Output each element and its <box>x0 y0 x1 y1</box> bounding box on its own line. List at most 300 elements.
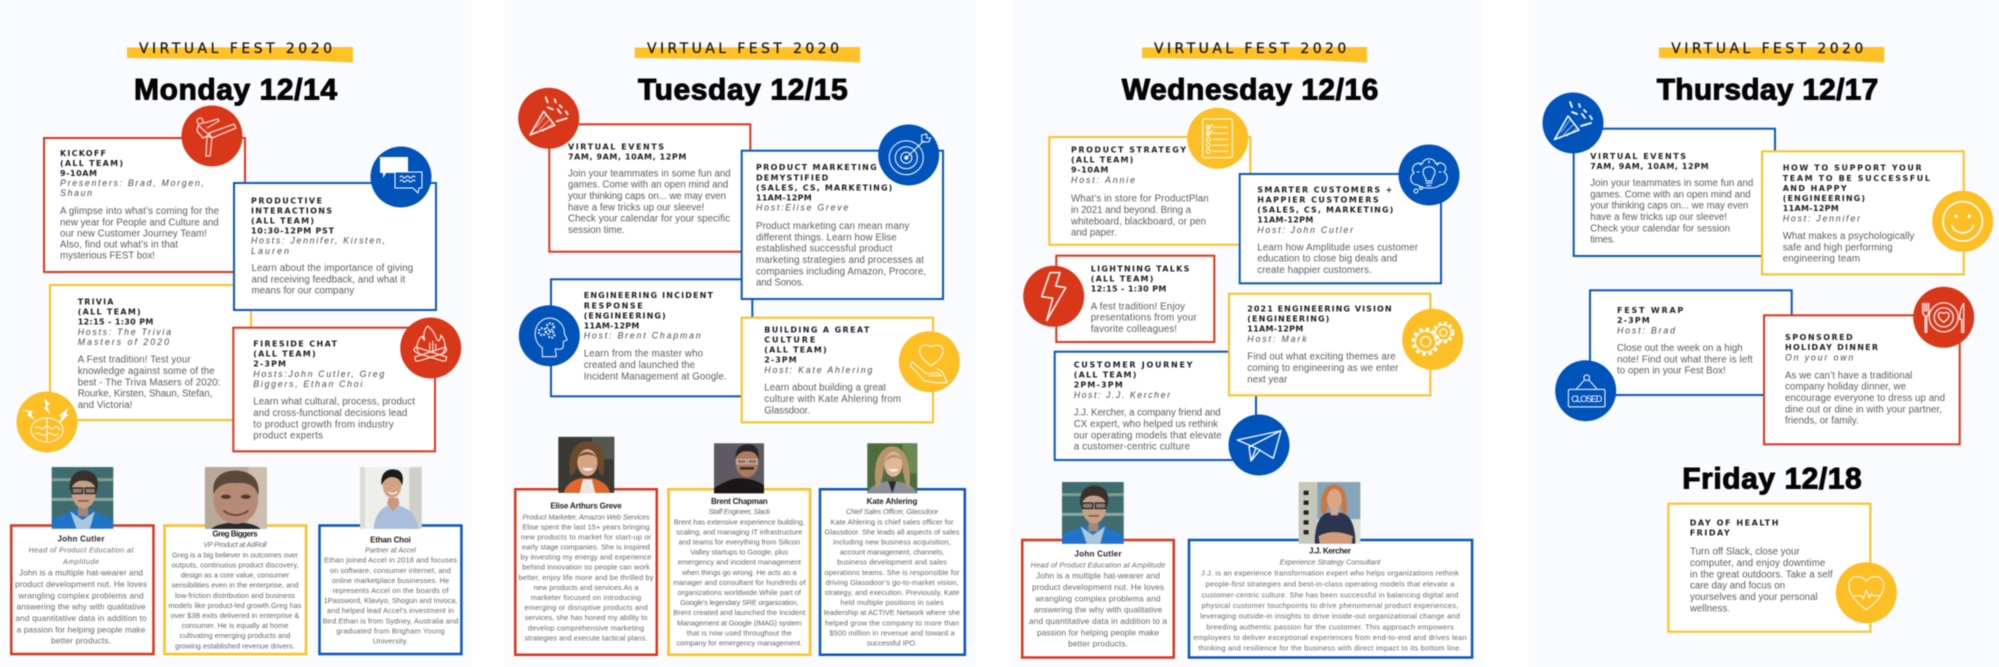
description: Rourke, Kirsten, Shaun, Stefan, <box>78 389 212 400</box>
bio: John Cutler <box>11 467 153 654</box>
session title: 7AM, 9AM, 10AM, 12PM <box>568 152 686 161</box>
icon: lightning bolt <box>1023 266 1084 327</box>
biography: organizations worldwide.While part of <box>678 588 802 597</box>
description: times. <box>1590 235 1615 246</box>
icon: closed sign: CLOSED <box>1571 394 1603 404</box>
role: Chief Sales Officer, Glassdoor <box>846 507 939 516</box>
biography: leadership at ACTIVE Network where she <box>824 608 960 617</box>
session title: (ALL TEAM) <box>251 216 314 225</box>
card: Lightning Talks <box>1023 256 1214 342</box>
description: Incident Management at Google. <box>584 371 727 382</box>
description: marketing strategies and processes at <box>756 255 924 266</box>
biography <box>1029 571 1167 649</box>
description: safe and high performing <box>1783 242 1893 253</box>
name: Ethan Choi <box>370 536 411 545</box>
heading: Tuesday: Tuesday 12/15 <box>638 74 848 106</box>
banner: Virtual Fest 2020: VIRTUAL FEST 2020 <box>139 41 332 57</box>
biography: cultivating emerging products and <box>180 631 290 640</box>
biography: 1Password, Klaviyo, Shogun and Invoca, <box>324 596 457 605</box>
description: mysterious FEST box! <box>60 251 155 262</box>
session title: 2-3PM <box>1617 316 1650 325</box>
description: dine out or dine in with your partner, <box>1785 404 1942 415</box>
description <box>568 168 731 236</box>
session title: CUSTOMER JOURNEY <box>1074 361 1193 370</box>
description: computer, and enjoy downtime <box>1690 558 1825 569</box>
session title: (ENGINEERING) <box>1783 194 1865 203</box>
name: John Cutler <box>1074 550 1122 559</box>
session title: TRIVIA <box>78 298 114 307</box>
description: new year for People and Culture and <box>60 217 219 228</box>
host: Host: John Cutler <box>1257 225 1354 235</box>
session title <box>1257 185 1393 225</box>
description: our new Customer Journey Team! <box>60 228 207 239</box>
biography: thinking and resilience for the business with direct impact to its bottom line. <box>1198 644 1462 653</box>
heading: Wednesday: Wednesday 12/16 <box>1122 74 1378 106</box>
session title <box>78 298 153 327</box>
session title: TEAM TO BE SUCCESSFUL <box>1783 174 1930 183</box>
session title <box>1617 306 1683 325</box>
biography: Google’s legendary SRE organization, <box>680 598 798 607</box>
hosts: Biggers, Ethan Choi <box>253 379 363 389</box>
biography: wrangling complex problems and <box>17 590 144 600</box>
name: Brent Chapman <box>711 497 768 506</box>
session title: ENGINEERING INCIDENT <box>584 291 714 300</box>
description: presentations from your <box>1091 313 1197 324</box>
banner: Virtual Fest 2020: VIRTUAL FEST 2020 <box>1671 41 1863 57</box>
icon: brain with lightning <box>16 392 78 452</box>
biography: develop comprehensive marketing <box>528 623 644 632</box>
photo: Ethan Choi <box>359 466 423 530</box>
description: in the great outdoors. Take a self <box>1690 569 1833 580</box>
name: J.J. Kercher <box>1309 547 1351 556</box>
description: Product marketing can mean many <box>756 221 909 232</box>
bio: Greg Biggers <box>164 467 306 654</box>
description: A fest tradition! Enjoy <box>1091 301 1185 312</box>
biography <box>168 550 302 650</box>
description: have a few tricks up our sleeve! <box>1590 212 1727 223</box>
biography: Glassdoor. She leads all aspects of sales <box>824 527 960 536</box>
description: company holiday dinner, we <box>1785 382 1906 393</box>
session title: RESPONSE <box>584 301 643 310</box>
description: to open in your Fest Box! <box>1617 366 1726 377</box>
biography: passion for helping people make <box>1037 627 1159 637</box>
description: and cross-functional decisions lead <box>253 408 407 419</box>
description: different things. Learn how Elise <box>756 232 897 243</box>
name: John Cutler <box>58 535 104 544</box>
description <box>1074 408 1222 453</box>
biography: marketer focused on introducing <box>531 593 641 602</box>
session title: (SALES, CS, MARKETING) <box>1257 206 1393 215</box>
biography: scaling, and managing IT infrastructure <box>676 527 802 536</box>
description: J.J. Kercher, a company friend and <box>1074 408 1221 419</box>
biography: Valley startups to Google, plus <box>690 548 789 557</box>
description: Close out the week on a high <box>1617 343 1743 354</box>
biography: company for emergency management. <box>676 638 802 648</box>
description: best - The Triva Masers of 2020: <box>78 377 220 388</box>
session title: DAY OF HEALTH <box>1690 518 1778 527</box>
session title <box>1783 164 1930 213</box>
description: culture with Kate Ahlering from <box>764 394 901 405</box>
description: note! Find out what there is left <box>1617 354 1753 365</box>
biography: sensibilities even in the enterprise, and <box>172 581 298 590</box>
description: education to close big deals and <box>1257 254 1397 265</box>
photo: J.J. Kercher <box>1298 481 1362 544</box>
session title: 2-3PM <box>764 356 797 365</box>
icon: campfire <box>400 318 461 378</box>
description: your thinking caps on... we may even <box>568 191 726 202</box>
session title: (ALL TEAM) <box>1071 156 1133 165</box>
role: Amplitude <box>62 557 99 566</box>
session title: FRIDAY <box>1690 528 1730 537</box>
panel: Tuesday <box>504 0 976 667</box>
description: companies including Amazon, Procore, <box>756 266 926 277</box>
host: Host: Jennifer <box>1783 213 1861 223</box>
icon: party popper <box>518 88 579 149</box>
bio: Ethan Choi <box>320 467 461 654</box>
description: Check your calendar for session <box>1590 223 1730 234</box>
biography: and teams for everything from Silicon <box>678 538 800 546</box>
banner: Virtual Fest 2020 <box>127 41 353 62</box>
biography <box>824 517 960 648</box>
host: Host: Brent Chapman <box>584 331 701 341</box>
session title: FIRESIDE CHAT <box>253 340 338 349</box>
card: Sponsored Holiday Dinner <box>1764 287 1974 444</box>
photo: Elise Arthurs Greve <box>558 436 616 494</box>
session title: 12:15 - 1:30 PM <box>78 318 153 327</box>
session title: CULTURE <box>764 336 815 345</box>
biography: that is now used throughout the <box>687 628 792 637</box>
name: Greg Biggers <box>212 530 258 539</box>
hosts <box>251 235 385 256</box>
biography: better products. <box>51 636 111 646</box>
description: games. Come with an open mind and <box>568 180 728 191</box>
biography <box>323 556 458 646</box>
biography: Ethan joined Accel in 2018 and focuses <box>324 556 457 565</box>
biography: a passion for helping people make <box>17 624 146 634</box>
description: Learn about building a great <box>764 383 886 394</box>
description: knowledge against some of the <box>78 366 215 377</box>
biography: helped grow the company to more than <box>825 618 959 627</box>
hosts: Lauren <box>251 246 289 256</box>
session title <box>1690 518 1778 537</box>
biography: product development nut. He loves <box>1032 582 1164 592</box>
hosts: Hosts: The Trivia <box>78 327 171 337</box>
description: What’s in store for ProductPlan <box>1071 194 1209 205</box>
description: a customer-centric culture <box>1074 442 1190 453</box>
host: Host: Brad <box>1617 325 1676 335</box>
description: A Fest tradition! Test your <box>78 355 191 366</box>
icon: heart with pulse <box>1836 562 1897 623</box>
icon: target with arrow <box>878 124 939 186</box>
session title: FEST WRAP <box>1617 306 1683 315</box>
description <box>1617 343 1753 377</box>
biography: better, enjoy life more and be thrilled by <box>518 573 654 582</box>
biography: graduated from Brigham Young <box>336 626 445 635</box>
presenters: Presenters: Brad, Morgen, <box>60 178 204 188</box>
biography: better products. <box>1068 639 1128 649</box>
session title: 12:15 - 1:30 PM <box>1091 285 1166 294</box>
description: Check your calendar for your specific <box>568 214 730 225</box>
card: Product Marketing Demystified <box>742 124 943 299</box>
icon: head with gears <box>519 305 580 366</box>
session title <box>756 163 892 202</box>
icon: heart in hand <box>899 331 960 392</box>
description: Learn how Amplitude uses customer <box>1257 242 1419 253</box>
card: Productive Interactions <box>234 146 436 310</box>
session title <box>1247 305 1392 334</box>
banner: Virtual Fest 2020 <box>1142 41 1367 62</box>
description: Join your teammates in some fun and <box>568 168 731 179</box>
presenters: Shaun <box>60 188 92 198</box>
session title: (ALL TEAM) <box>60 159 123 168</box>
biography: online marketplace businesses. He <box>332 576 449 585</box>
session title: 10:30-12PM PST <box>251 226 335 235</box>
session title: BUILDING A GREAT <box>764 326 870 335</box>
hosts: Masters of 2020 <box>78 337 169 347</box>
biography: outputs, continuous product discovery, <box>172 560 298 569</box>
biography: new products and services.As a <box>534 583 639 592</box>
biography <box>15 568 147 646</box>
card: Fireside Chat <box>233 318 461 451</box>
biography: and helped lead Accel’s investment in <box>327 606 454 615</box>
biography: wrangling complex problems and <box>1034 593 1161 603</box>
card: Customer Journey <box>1055 352 1290 476</box>
session title <box>764 326 870 365</box>
banner: Virtual Fest 2020 <box>635 41 860 62</box>
icon: smiley face <box>1932 191 1993 252</box>
heading: Monday: Monday 12/14 <box>134 74 337 106</box>
session title: HAPPIER CUSTOMERS <box>1257 195 1379 204</box>
biography: strategies and execute tactical plans. <box>524 633 648 642</box>
card: Engineering Incident Response <box>519 279 752 396</box>
icon: chat bubbles <box>370 146 432 208</box>
description: create happier customers. <box>1257 265 1372 276</box>
biography: behind innovation so people can work <box>522 563 650 572</box>
description: care day and focus on <box>1690 581 1785 592</box>
description <box>1783 231 1915 265</box>
description: coming to engineering as we enter <box>1247 363 1399 374</box>
biography: by investing my energy and experience <box>520 553 652 562</box>
biography: people-first strategies and best-in-class operating models that elevate a <box>1206 580 1455 589</box>
biography: answering the why with qualitative <box>16 602 146 612</box>
description: and paper. <box>1071 228 1117 239</box>
description <box>764 383 901 416</box>
biography: when things go wrong. He acts as a <box>681 568 798 577</box>
description <box>1257 242 1419 276</box>
session title: 11AM-12PM <box>584 321 639 330</box>
biography: services, she has honed my ability to <box>525 613 647 622</box>
description: and receiving feedback, and what it <box>252 274 405 285</box>
host: Host: Kate Ahlering <box>764 365 872 375</box>
biography: Management at Google (IMAG) system <box>677 618 802 627</box>
bio: Elise Arthurs Greve <box>515 437 657 655</box>
hosts: Hosts:John Cutler, Greg <box>253 369 384 379</box>
biography: emerging or disruptive products and <box>524 603 648 612</box>
description: Learn what cultural, process, product <box>253 397 415 408</box>
description: engineering team <box>1783 254 1860 265</box>
description: As we can’t have a traditional <box>1785 370 1912 381</box>
role: Partner at Accel <box>365 546 416 555</box>
biography: successful IPO. <box>867 638 917 648</box>
description: Find out what exciting themes are <box>1247 352 1396 363</box>
biography: customer-centric culture. She has been successful in balancing digital and <box>1202 590 1458 599</box>
name: Elise Arthurs Greve <box>550 502 622 511</box>
photo: Kate Ahlering <box>866 442 918 494</box>
session title: (SALES, CS, MARKETING) <box>756 183 892 192</box>
description: created and launched the <box>584 360 695 371</box>
session title: (ENGINEERING) <box>1247 315 1329 324</box>
session title: AND HAPPY <box>1783 184 1847 193</box>
session title: VIRTUAL EVENTS <box>568 142 664 151</box>
session title <box>1071 146 1186 175</box>
role <box>29 546 134 566</box>
session title: SMARTER CUSTOMERS + <box>1257 185 1392 194</box>
description: in 2021 and beyond. Bring a <box>1071 205 1192 216</box>
note: On your own <box>1785 352 1853 362</box>
session title: 9-10AM <box>60 169 97 178</box>
icon: gears <box>1402 309 1463 370</box>
icon: party popper <box>1542 92 1604 154</box>
biography: Bird.Ethan is from Sydney, Australia and <box>323 616 458 625</box>
session title: 11AM-12PM <box>1247 325 1303 334</box>
description: to product growth from industry <box>253 419 394 430</box>
card: Day of Health <box>1668 504 1897 632</box>
hosts <box>253 369 384 389</box>
card: How to Support Your Team <box>1762 151 1993 274</box>
session title: 2021 ENGINEERING VISION <box>1247 305 1392 314</box>
description: wellness. <box>1689 603 1730 614</box>
session title <box>584 291 714 330</box>
host: Host:Elise Greve <box>756 203 848 213</box>
biography: product development nut. He loves <box>15 579 147 589</box>
session title: HOW TO SUPPORT YOUR <box>1783 164 1922 173</box>
biography: growing established revenue drivers. <box>175 641 295 650</box>
biography: Elise spent the last 15+ years bringing <box>522 522 650 531</box>
description: and Victoria! <box>78 400 132 411</box>
card: Product Strategy <box>1049 108 1250 245</box>
icon: karate kick <box>182 106 242 166</box>
description: CX expert, who helped us rethink <box>1074 419 1218 430</box>
biography: low-friction distribution and business <box>175 591 295 600</box>
biography: over $3B exits delivered in enterprise & <box>171 611 299 620</box>
description: yourselves and your personal <box>1690 592 1818 603</box>
panel: Monday <box>0 0 472 667</box>
session title: (ALL TEAM) <box>1074 371 1136 380</box>
biography: account management, channels, <box>840 548 944 557</box>
session title <box>1074 361 1193 390</box>
biography: physical customer touchpoints to drive phenomenal product experiences, <box>1202 601 1458 610</box>
bio: J.J. Kercher <box>1189 482 1472 658</box>
host: Host: J.J. Kercher <box>1074 390 1171 400</box>
name: Kate Ahlering <box>867 497 917 506</box>
biography: consumer. He is equally at home <box>182 621 288 630</box>
description <box>1590 178 1753 246</box>
biography: held multiple positions in sales <box>840 598 944 607</box>
role: Product Marketer, Amazon Web Services <box>522 512 650 521</box>
session title <box>253 340 338 369</box>
description: encourage everyone to dress up and <box>1785 393 1945 404</box>
bio: Kate Ahlering <box>820 443 965 655</box>
biography: John is a multiple hat-wearer and <box>1036 571 1160 581</box>
biography <box>673 517 807 648</box>
description: product experts <box>253 430 323 442</box>
biography: and quantitative data in addition to a <box>1029 616 1167 626</box>
session title: PRODUCT STRATEGY <box>1071 146 1186 155</box>
session title <box>1091 265 1190 294</box>
description: What makes a psychologically <box>1783 231 1915 242</box>
biography: represents Accel on the boards of <box>332 586 449 595</box>
card: Building a Great Culture <box>742 318 960 422</box>
bio: John Cutler <box>1022 482 1174 658</box>
description: games. Come with an open mind and <box>1590 189 1751 200</box>
biography: on software, consumer internet, and <box>330 566 451 575</box>
description: Glassdoor. <box>764 405 810 416</box>
description: whiteboard, blackboard, or pen <box>1070 216 1206 227</box>
description <box>1247 352 1399 385</box>
biography: Brent created and launched the Incident <box>673 608 805 617</box>
session title: PRODUCT MARKETING <box>756 163 877 172</box>
icon: closed sign <box>1555 360 1616 421</box>
session title: (ALL TEAM) <box>764 346 827 355</box>
biography: Kate Ahlering is chief sales officer for <box>830 517 954 526</box>
banner: Virtual Fest 2020: VIRTUAL FEST 2020 <box>1154 41 1346 57</box>
role: Head of Product Education at <box>29 546 134 555</box>
host: Host: Mark <box>1247 334 1307 344</box>
biography: driving Glassdoor’s go-to-market vision, <box>826 578 958 587</box>
biography: models like product-led growth.Greg has <box>168 601 302 610</box>
biography <box>518 522 654 642</box>
session title <box>1785 333 1878 352</box>
description: means for our company <box>252 286 354 297</box>
session title <box>251 196 335 235</box>
description <box>584 349 727 382</box>
session title <box>60 149 123 178</box>
description: Learn from the master who <box>584 349 703 360</box>
description: friends, or family. <box>1785 416 1859 427</box>
session title: 11AM-12PM <box>1257 216 1313 225</box>
heading: Friday: Friday 12/18 <box>1682 462 1862 495</box>
hosts <box>78 327 171 347</box>
session title: 7AM, 9AM, 10AM, 12PM <box>1590 162 1709 171</box>
banner: Virtual Fest 2020: VIRTUAL FEST 2020 <box>647 41 839 57</box>
session title <box>1590 152 1709 171</box>
biography: University. <box>373 636 408 646</box>
biography: design as a core value, consumer <box>181 570 290 580</box>
biography: emergency and incident management <box>678 558 801 567</box>
session title: 2PM-3PM <box>1074 381 1123 390</box>
biography: J.J. is an experience transformation expert who helps organizations rethink <box>1201 569 1459 578</box>
session title: PRODUCTIVE <box>251 196 322 205</box>
panel: Thursday and Friday <box>1528 0 1999 667</box>
card: Virtual Events <box>1542 92 1775 256</box>
photo: John Cutler <box>50 466 114 530</box>
session title <box>568 142 686 161</box>
session title: KICKOFF <box>60 149 106 158</box>
icon: checklist <box>1187 108 1248 169</box>
session title: 11AM-12PM <box>1783 204 1839 213</box>
biography: operations teams. She is responsible for <box>824 568 960 577</box>
card: Smarter Customers <box>1240 144 1460 283</box>
session title: LIGHTNING TALKS <box>1091 265 1190 274</box>
description <box>1689 547 1833 614</box>
card: Kickoff <box>44 106 245 272</box>
session title: 2-3PM <box>253 360 286 369</box>
biography: and quantitative data in addition to <box>15 613 147 623</box>
session title: (ALL TEAM) <box>78 308 141 317</box>
biography: including new business acquisition, <box>833 538 951 546</box>
session title: HOLIDAY DINNER <box>1785 343 1878 352</box>
icon: paper plane <box>1228 414 1290 476</box>
